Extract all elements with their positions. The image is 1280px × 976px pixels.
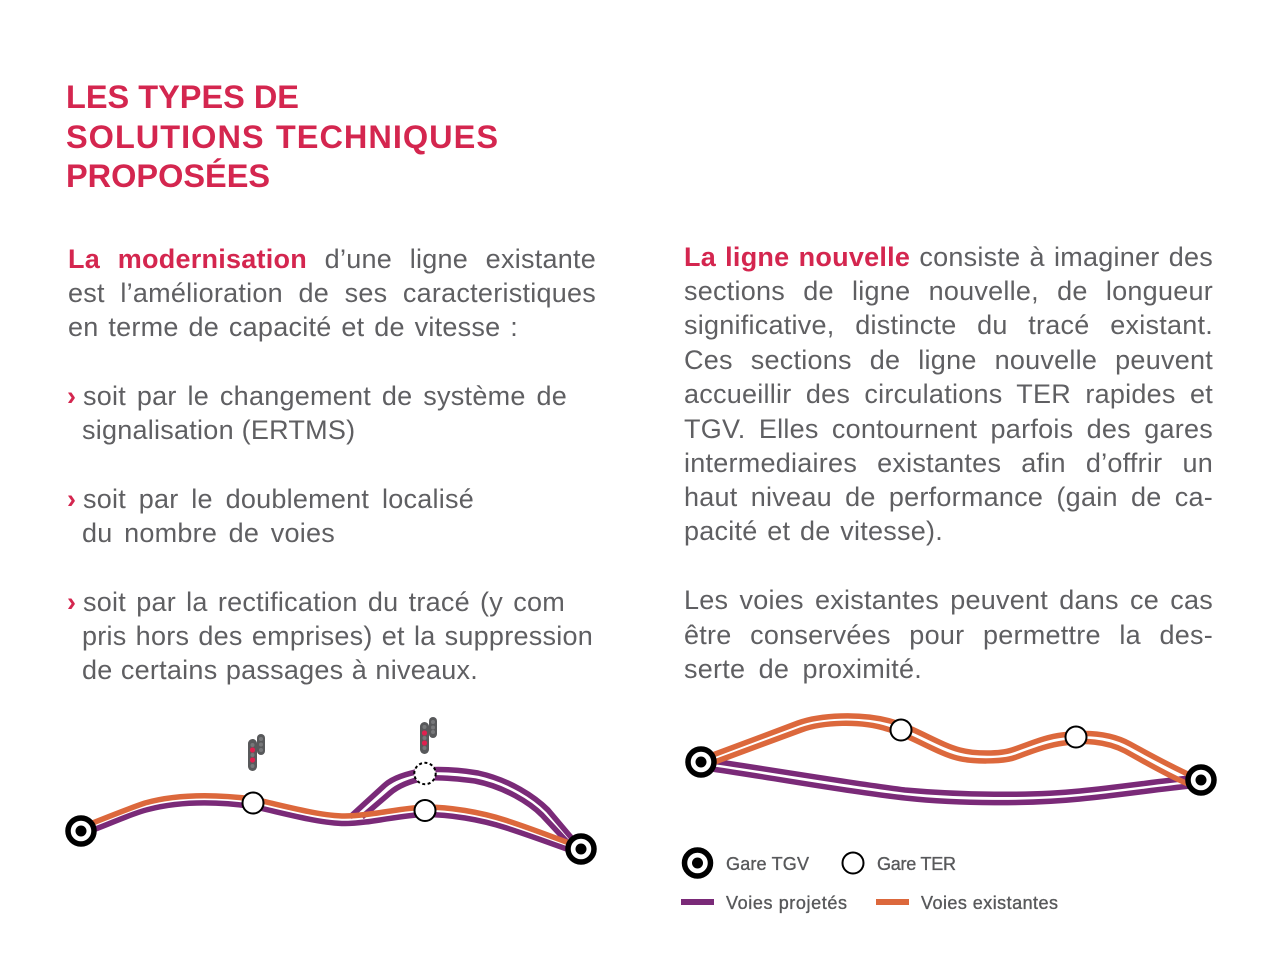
text block: la ligne nouvelle: significative, distincte du tracé existant. [684,310,1213,340]
station: TER [414,800,436,821]
station: TER [1066,726,1086,748]
text block: la ligne nouvelle: accueillir des circulations TER rapides et [684,379,1213,409]
text block: la ligne nouvelle: être conservées pour permettre la des- [684,620,1213,650]
title: LES TYPES DE [66,79,299,115]
track: projected branch [350,770,575,845]
text block: la modernisation: soit par la rectification du tracé (y com [83,587,565,617]
icon: signal 2 [420,717,437,754]
text block: la modernisation: soit par le changement de système de [83,381,567,411]
text block: la modernisation: › [67,587,76,617]
text block: la modernisation: de certains passages à niveaux. [82,655,478,685]
diagram: modernisation [68,717,594,862]
text block: la ligne nouvelle: intermediaires existantes afin d’offrir un [684,448,1213,478]
text block: la modernisation: du nombre de voies [82,518,335,548]
text block: la ligne nouvelle: sections de ligne nouvelle, de longueur [684,276,1213,306]
title: PROPOSÉES [66,158,270,194]
text block: la modernisation: est l’amélioration de ses caracteristiques [68,278,596,308]
legend: voies existantes: Voies existantes [921,893,1058,913]
station: TER [242,792,264,814]
station: TGV left [68,818,94,844]
text block: la ligne nouvelle: Ces sections de ligne nouvelle peuvent [684,345,1213,375]
track: existing line [90,796,572,844]
text block: la ligne nouvelle: haut niveau de performance (gain de ca- [684,482,1213,512]
text block: la modernisation: › [67,381,76,411]
text block: la modernisation: en terme de capacité et de vitesse : [68,312,518,342]
legend: voies projetés: Voies projetés [726,893,847,913]
text block: la modernisation [67,244,596,685]
track: existing line [710,716,1192,784]
station: TGV right [1188,767,1214,793]
title [66,79,499,194]
text block: la modernisation: La modernisation d’une ligne existante [68,244,596,274]
station: TGV right [568,836,594,862]
legend: gare TER [842,852,956,874]
text block: la ligne nouvelle: TGV. Elles contournent parfois des gares [684,414,1213,444]
legend: gare TGV [684,850,809,876]
text block: la modernisation: soit par le doublement localisé [83,484,474,514]
text block: la ligne nouvelle: Les voies existantes peuvent dans ce cas [684,585,1213,615]
diagram: ligne nouvelle [688,716,1214,803]
icon: signal 1 [248,734,265,771]
legend: gare TGV: Gare TGV [726,854,809,874]
text block: la ligne nouvelle [684,242,1213,684]
text block: la modernisation: signalisation (ERTMS) [82,415,355,445]
text block: la ligne nouvelle: serte de proximité. [684,654,922,684]
station: TGV left [688,749,714,775]
station: new TER, dashed [414,763,436,784]
text block: la ligne nouvelle: pacité et de vitesse). [684,516,943,546]
text block: la ligne nouvelle: La ligne nouvelle consiste à imaginer des [684,242,1213,272]
title: SOLUTIONS TECHNIQUES [66,119,499,155]
track: projected line [712,761,1190,803]
station: TER [890,720,912,740]
text block: la modernisation: pris hors des emprises) et la suppression [82,621,593,651]
legend: gare TER: Gare TER [877,854,956,874]
text block: la modernisation: › [67,484,76,514]
legend [681,850,1058,913]
track: projected line [90,803,572,851]
